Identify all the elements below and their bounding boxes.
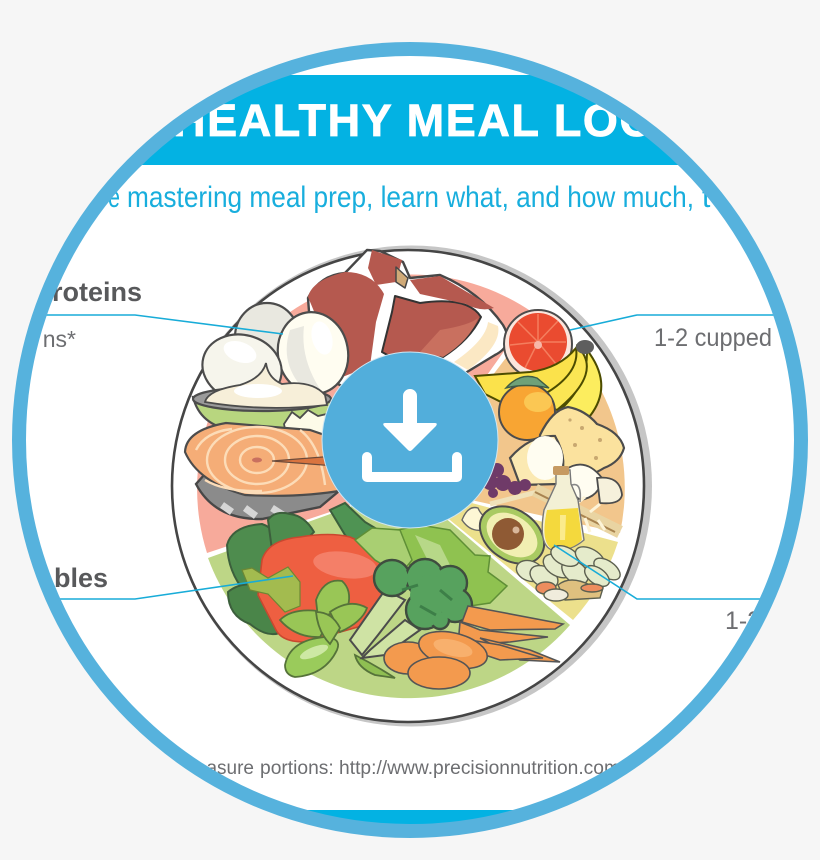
food: grapefruit: [504, 310, 572, 378]
food: basil: [280, 581, 395, 678]
food: lettuce: [355, 525, 507, 606]
food: orange: [499, 376, 555, 440]
label: fats portion: 1-2: [725, 607, 761, 635]
food: olive oil bottle: [542, 466, 584, 550]
callout lines: [40, 315, 775, 599]
food: carrots: [384, 606, 563, 689]
label: carbs portion: 1-2 cupped: [654, 324, 772, 352]
bottom banner: [308, 810, 512, 824]
food: grapes: [482, 463, 531, 498]
food: steak: [308, 250, 508, 400]
footer note: measure: [180, 758, 254, 779]
label: proteins: [44, 282, 141, 347]
food: broccoli: [350, 559, 472, 658]
subtitle: mastering meal prep, learn what, and how much,: [127, 181, 694, 214]
food: dark greens: [227, 503, 395, 634]
sector: vegetables: [208, 486, 570, 698]
icon: download arrow: [367, 389, 457, 477]
food: cream nut: [462, 508, 495, 530]
food: salmon: [185, 423, 345, 519]
food: yogurt bowl: [193, 363, 332, 432]
title banner: HEALTHY MEAL LOOKS: [173, 95, 722, 146]
sector: proteins: [197, 275, 532, 553]
food: eggs: [195, 303, 355, 410]
food: rice: [284, 410, 335, 436]
label: proteins: Proteins: [34, 277, 142, 307]
subtitle: t: [702, 181, 711, 214]
food: avocado: [469, 494, 555, 576]
food: grain: [490, 490, 620, 532]
footer note: portions: http://www.precisionnutrition.com: [260, 758, 620, 779]
sector: carbs: [408, 316, 625, 533]
food: red pepper: [242, 534, 390, 642]
label: proteins: ns*: [43, 326, 76, 352]
title banner: [142, 75, 678, 165]
label: vegetables: bles: [54, 563, 108, 593]
food: bananas: [475, 340, 601, 416]
sector: fats: [408, 486, 618, 620]
subtitle: e: [108, 181, 120, 214]
food: potatoes: [510, 407, 624, 503]
food: seeds and nuts: [513, 542, 624, 601]
download button: [322, 352, 498, 528]
clipped infographic content: [44, 75, 770, 824]
plate: [171, 246, 652, 726]
